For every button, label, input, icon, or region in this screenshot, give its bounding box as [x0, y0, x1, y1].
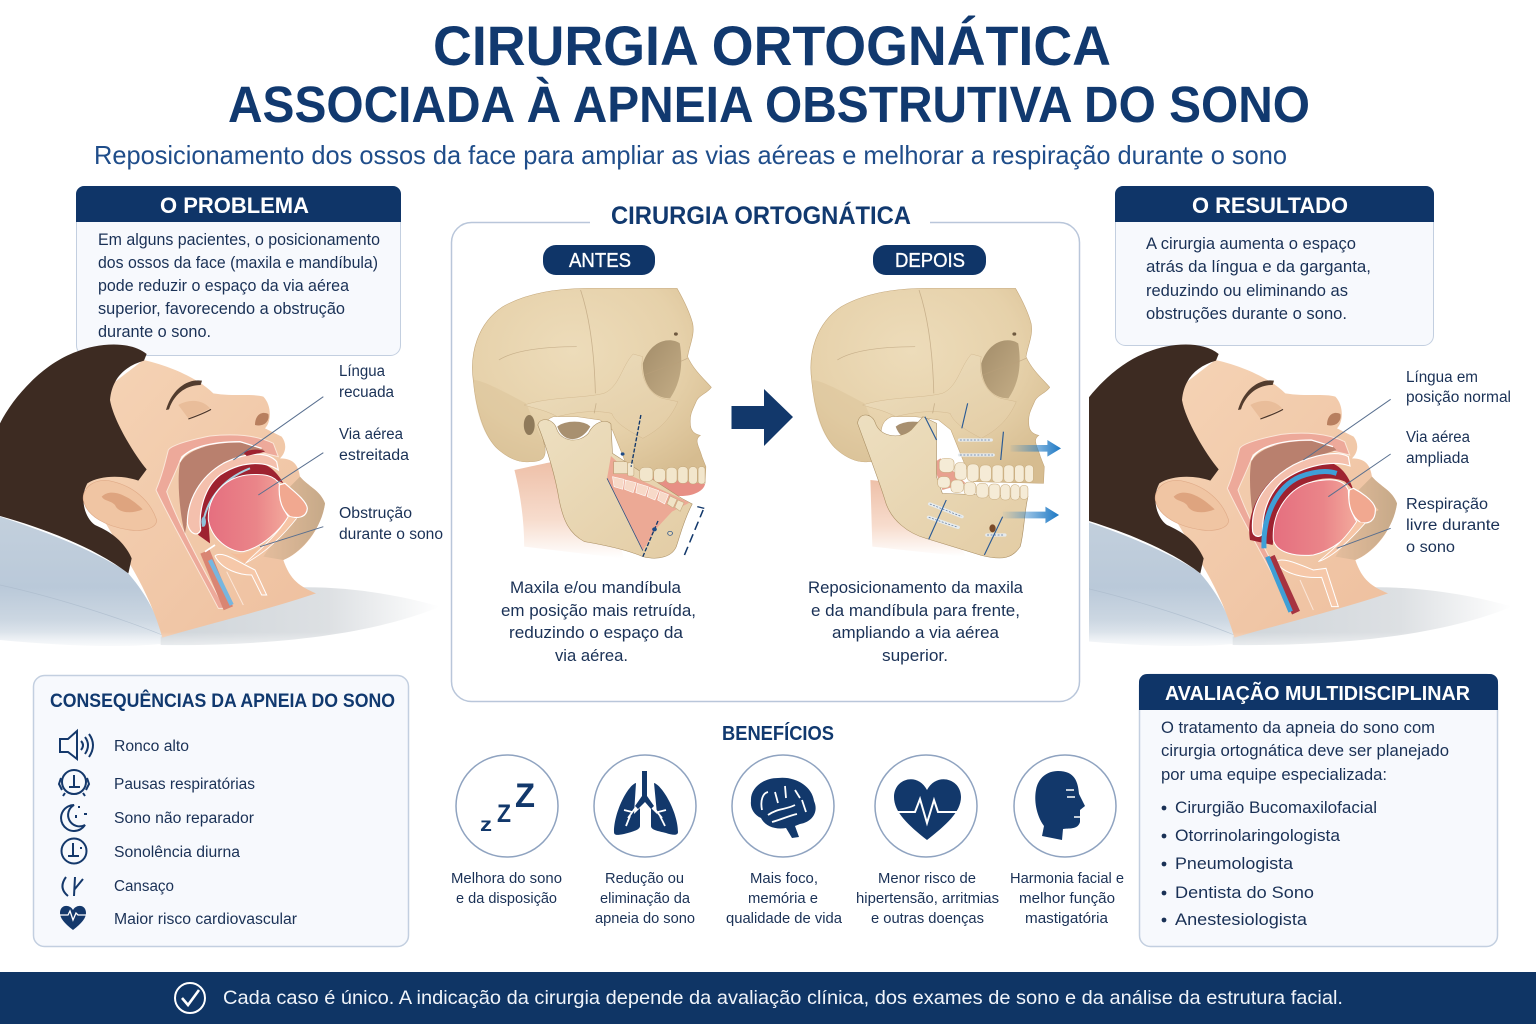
specialist list: Dentista do Sono — [1175, 883, 1314, 902]
benefit: heart — [856, 755, 999, 927]
caption: before: em posição mais retruída, — [501, 602, 696, 620]
badge: antes — [543, 245, 655, 275]
title: CIRURGIA ORTOGNÁTICA — [433, 14, 1111, 77]
icon: tiredness — [62, 877, 83, 896]
panel: o resultado: reduzindo ou eliminando as — [1146, 282, 1348, 300]
caption: before: via aérea. — [555, 647, 628, 665]
panel: consequências da apneia do sono: Ronco alto — [114, 738, 189, 755]
benefit: heart: Menor risco de — [878, 871, 976, 887]
benefit: facial harmony: mastigatória — [1025, 911, 1109, 927]
panel: avaliação multidisciplinar: AVALIAÇÃO MULTIDISCIPLINAR — [1165, 682, 1471, 705]
labels: right airway: o sono — [1406, 539, 1455, 556]
icon: check — [175, 983, 205, 1013]
benefit: sleep: z — [480, 815, 492, 836]
benefit: lungs: apneia do sono — [595, 911, 695, 927]
labels: left airway: durante o sono — [339, 526, 443, 543]
labels: right airway: posição normal — [1406, 389, 1511, 406]
panel heading: CIRURGIA ORTOGNÁTICA — [611, 201, 911, 230]
benefit: sleep — [451, 755, 562, 907]
icon: daytime sleepiness — [62, 838, 86, 864]
benefit: heart: e outras doenças — [871, 911, 984, 927]
labels: right airway: livre durante — [1406, 517, 1500, 534]
caption: after: ampliando a via aérea — [832, 624, 1000, 642]
section: benefícios — [451, 722, 1124, 927]
benefit: sleep: Melhora do sono — [451, 871, 562, 887]
panel: o problema: pode reduzir o espaço da via aérea — [98, 277, 350, 295]
benefit: brain: Mais foco, — [750, 871, 818, 887]
caption: after — [808, 579, 1024, 665]
icon: breathing pauses — [59, 770, 89, 796]
badge: depois — [873, 245, 986, 275]
panel: o problema: Em alguns pacientes, o posicionamento — [98, 231, 380, 249]
badge: depois: DEPOIS — [895, 250, 965, 272]
benefit: brain: qualidade de vida — [726, 911, 843, 927]
benefit: facial harmony — [1010, 755, 1124, 927]
panel: o problema: O PROBLEMA — [160, 193, 309, 218]
benefit: lungs: Redução ou — [605, 871, 684, 887]
panel: avaliação multidisciplinar: O tratamento da apneia do sono com — [1161, 719, 1435, 737]
panel: o problema — [76, 186, 401, 356]
panel: consequências da apneia do sono: Cansaço — [114, 878, 174, 895]
panel: o resultado: A cirurgia aumenta o espaço — [1146, 235, 1356, 253]
illustration: patient with narrowed airway — [0, 344, 443, 656]
panel: avaliação multidisciplinar: cirurgia ortognática deve ser planejado — [1161, 742, 1449, 760]
illustration: patient with enlarged airway — [1089, 344, 1510, 646]
footer banner: Cada caso é único. A indicação da cirurgia depende da avaliação clínica, dos exames de sono e da análise da estrutura facial. — [223, 987, 1343, 1009]
benefit: heart: hipertensão, arritmias — [856, 891, 999, 907]
benefit: sleep: e da disposição — [456, 891, 557, 907]
panel: consequências da apneia do sono — [34, 676, 408, 946]
specialist list — [1162, 798, 1377, 929]
labels: left airway: Via aérea — [339, 426, 403, 443]
specialist list: Anestesiologista — [1175, 910, 1308, 929]
benefit: brain: memória e — [748, 891, 818, 907]
panel: consequências da apneia do sono: Maior risco cardiovascular — [114, 911, 297, 928]
panel: cirurgia ortognática — [452, 201, 1080, 702]
panel: consequências da apneia do sono: Sono não reparador — [114, 810, 254, 827]
labels: right airway — [1406, 369, 1511, 556]
panel: o problema: dos ossos da face (maxila e mandíbula) — [98, 254, 378, 272]
specialist list: Pneumologista — [1175, 854, 1294, 873]
labels: right airway: Via aérea — [1406, 429, 1470, 446]
icon: loud snoring — [60, 731, 93, 759]
specialist list: Otorrinolaringologista — [1175, 826, 1341, 845]
subtitle: Reposicionamento dos ossos da face para ampliar as vias aéreas e melhorar a respiração durante o sono — [94, 140, 1287, 170]
panel: o resultado: atrás da língua e da garganta, — [1146, 258, 1371, 276]
skull before surgery — [472, 288, 711, 558]
benefit: facial harmony: melhor função — [1019, 891, 1115, 907]
labels: left airway — [339, 363, 443, 543]
arrow: before to after — [732, 389, 793, 446]
benefit: facial harmony: Harmonia facial e — [1010, 871, 1124, 887]
benefit: lungs — [594, 755, 696, 927]
benefit: sleep: Z — [515, 777, 535, 815]
panel: avaliação multidisciplinar: por uma equipe especializada: — [1161, 766, 1387, 784]
skull after surgery — [811, 288, 1061, 558]
labels: left airway: Obstrução — [339, 505, 412, 522]
labels: right airway: ampliada — [1406, 450, 1469, 467]
labels: left airway: estreitada — [339, 447, 409, 464]
panel: consequências da apneia do sono: Sonolência diurna — [114, 844, 240, 861]
labels: left airway: recuada — [339, 384, 394, 401]
panel: o resultado — [1115, 186, 1434, 346]
benefit: sleep: Z — [497, 800, 511, 828]
benefit: brain — [726, 755, 843, 927]
panel: consequências da apneia do sono: Pausas respiratórias — [114, 776, 255, 793]
caption: after: Reposicionamento da maxila — [808, 579, 1024, 597]
title — [228, 14, 1310, 133]
labels: right airway: Língua em — [1406, 369, 1478, 386]
caption: before: reduzindo o espaço da — [509, 624, 684, 642]
panel: o resultado: O RESULTADO — [1192, 193, 1348, 218]
badge: antes: ANTES — [569, 250, 631, 272]
panel: o problema: superior, favorecendo a obstrução — [98, 300, 345, 318]
panel: o problema: durante o sono. — [98, 323, 211, 341]
panel: consequências da apneia do sono: CONSEQUÊNCIAS DA APNEIA DO SONO — [50, 690, 395, 712]
benefit: lungs: eliminação da — [600, 891, 691, 907]
icon: non-restorative sleep — [61, 805, 87, 831]
panel: o resultado: obstruções durante o sono. — [1146, 305, 1347, 323]
panel: avaliação multidisciplinar — [1139, 674, 1498, 946]
caption: after: e da mandíbula para frente, — [811, 602, 1020, 620]
title: ASSOCIADA À APNEIA OBSTRUTIVA DO SONO — [228, 76, 1310, 133]
section: benefícios: BENEFÍCIOS — [722, 722, 834, 745]
caption: before — [501, 579, 696, 665]
specialist list: Cirurgião Bucomaxilofacial — [1175, 798, 1377, 817]
caption: before: Maxila e/ou mandíbula — [510, 579, 682, 597]
icon: cardiovascular risk — [60, 906, 86, 930]
caption: after: superior. — [882, 647, 948, 665]
labels: left airway: Língua — [339, 363, 385, 380]
labels: right airway: Respiração — [1406, 496, 1488, 513]
footer banner — [0, 972, 1536, 1024]
